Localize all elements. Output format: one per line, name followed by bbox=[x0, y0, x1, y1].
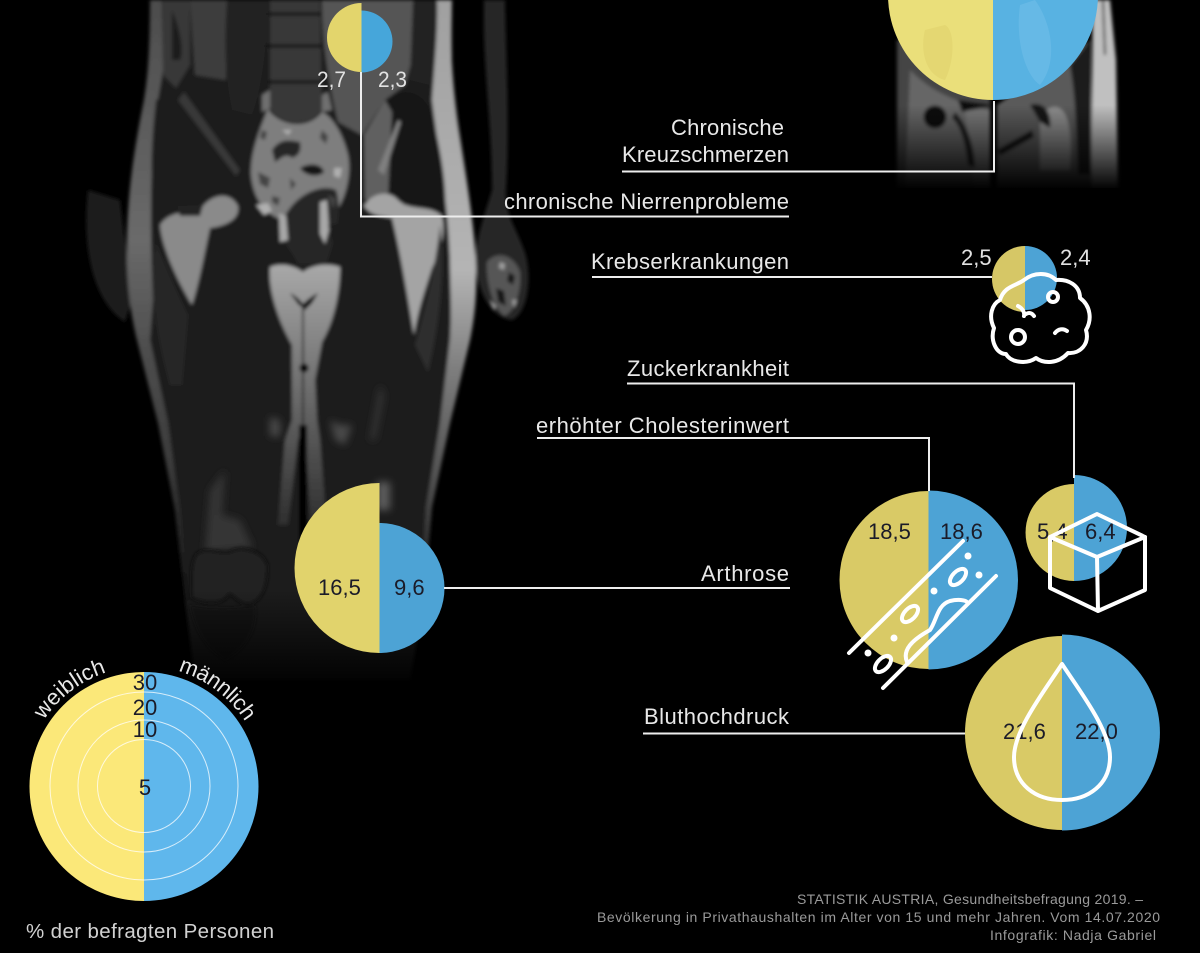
MRI image: full body scan bbox=[86, 0, 528, 680]
label: Zuckerkrankheit: Zuckerkrankheit bbox=[627, 356, 789, 381]
circle: Arthrose bbox=[294, 483, 444, 653]
label: chronische Nierenprobleme bbox=[361, 72, 789, 216]
circle: Arthrose: 9,6 bbox=[394, 575, 425, 600]
legend: scale circle: 10 bbox=[133, 717, 157, 742]
source note: Bevölkerung in Privathaushalten im Alter von 15 und mehr Jahren. Vom 14.07.2020 bbox=[597, 909, 1160, 925]
circle: Bluthochdruck: 21,6 bbox=[1003, 719, 1046, 744]
values: Nierenprobleme bbox=[317, 67, 407, 92]
values: Krebserkrankungen: 2,4 bbox=[1060, 245, 1091, 270]
MRI image: lumbar spine top right bbox=[897, 0, 1118, 195]
label: Chronische Kreuzschmerzen bbox=[622, 101, 994, 172]
icon: sugar cube bbox=[1050, 514, 1145, 611]
values: Nierenprobleme: 2,7 bbox=[317, 67, 346, 92]
circle: Zuckerkrankheit: 5,4 bbox=[1037, 519, 1068, 544]
MRI image: knee joint bbox=[190, 549, 267, 660]
label: erhöhter Cholesterinwert: erhöhter Cholesterinwert bbox=[536, 413, 789, 438]
values: Krebserkrankungen: 2,5 bbox=[961, 245, 992, 270]
legend: caption: % der befragten Personen bbox=[26, 920, 274, 943]
MRI image: thigh and knee detail bbox=[205, 385, 390, 552]
MRI lower cover bbox=[130, 689, 470, 703]
label: Arthrose: Arthrose bbox=[701, 561, 789, 586]
label: Bluthochdruck: Bluthochdruck bbox=[644, 704, 790, 729]
circle: Krebserkrankungen bbox=[992, 246, 1057, 312]
circle: Bluthochdruck bbox=[965, 634, 1160, 830]
label: Chronische Kreuzschmerzen: Chronische bbox=[671, 115, 784, 140]
label: chronische Nierenprobleme: chronische Nierrenprobleme bbox=[504, 189, 789, 214]
label: Zuckerkrankheit bbox=[627, 356, 1074, 478]
circle: Bluthochdruck: 22,0 bbox=[1075, 719, 1118, 744]
icon: artery with cholesterol bbox=[849, 541, 996, 688]
MRI lower fade bbox=[130, 590, 470, 690]
circle: Chronische Kreuzschmerzen bbox=[888, 0, 1098, 100]
circle: chronische Nierenprobleme bbox=[327, 3, 392, 72]
values: Krebserkrankungen bbox=[961, 245, 1091, 270]
circle: erhöhter Cholesterinwert: 18,6 bbox=[940, 519, 983, 544]
legend: scale circle: 30 bbox=[133, 670, 157, 695]
circle: erhöhter Cholesterinwert bbox=[840, 490, 1018, 670]
legend: scale circle: 20 bbox=[133, 695, 157, 720]
MRI spine cover bbox=[885, 188, 1130, 202]
icon: tumour cell bbox=[991, 274, 1090, 362]
label: Krebserkrankungen: Krebserkrankungen bbox=[591, 249, 789, 274]
circle: Zuckerkrankheit bbox=[1026, 475, 1127, 581]
MRI spine fade bbox=[885, 105, 1130, 190]
values: Nierenprobleme: 2,3 bbox=[378, 67, 407, 92]
circle: erhöhter Cholesterinwert: 18,5 bbox=[868, 519, 911, 544]
label: Chronische Kreuzschmerzen: Kreuzschmerzen bbox=[622, 142, 789, 167]
legend: scale circle: 5 bbox=[139, 775, 151, 800]
circle: Arthrose: 16,5 bbox=[318, 575, 361, 600]
legend: scale circle bbox=[29, 670, 258, 901]
circle: Zuckerkrankheit: 6,4 bbox=[1085, 519, 1116, 544]
source note: STATISTIK AUSTRIA, Gesundheitsbefragung 2019. – bbox=[797, 891, 1143, 907]
icon: blood drop bbox=[1014, 664, 1110, 800]
source note bbox=[597, 891, 1160, 943]
label: erhöhter Cholesterinwert bbox=[536, 413, 929, 491]
legend: label männlich: männlich bbox=[180, 660, 254, 720]
source note: Infografik: Nadja Gabriel bbox=[990, 927, 1156, 943]
legend: label weiblich: weiblich bbox=[34, 660, 106, 718]
